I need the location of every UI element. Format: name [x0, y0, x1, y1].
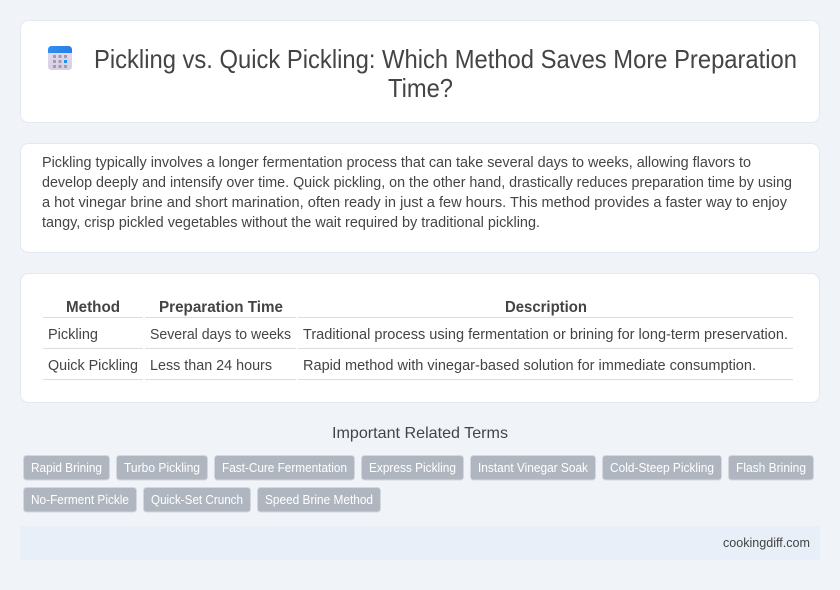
related term tags: Fast-Cure Fermentation: [222, 460, 347, 475]
related term tags: Cold-Steep Pickling: [610, 460, 714, 475]
related term tags: Turbo Pickling: [124, 460, 200, 475]
table row: quick pickling: Quick Pickling: [48, 358, 138, 374]
panel: comparison table: [20, 274, 820, 402]
related term tags: No-Ferment Pickle: [31, 492, 129, 507]
heading: Time?: [388, 75, 453, 103]
table header: Method: [66, 299, 120, 316]
related term tags: Quick-Set Crunch: [151, 492, 243, 507]
table row: pickling: Pickling: [48, 327, 98, 343]
table header: Preparation Time: [159, 299, 283, 316]
related term tags: Rapid Brining: [31, 460, 102, 475]
related term tags: Speed Brine Method: [265, 492, 373, 507]
footer bar: cookingdiff.com: [723, 535, 810, 550]
heading: Pickling vs. Quick Pickling: Which Method Saves More Preparation: [94, 46, 797, 74]
footer bar: [20, 526, 820, 560]
related term tags: [24, 456, 814, 512]
text block: summary: Pickling typically involves a longer fermentation process that can take several days to weeks, allowing flavors to: [42, 155, 751, 171]
icon: calendar: [48, 46, 72, 70]
text block: summary: a hot vinegar brine and short marination, often ready in just a few hours. This method provides a faster way to enjoy: [42, 195, 788, 211]
panel: summary paragraph: [20, 144, 820, 252]
related term tags: Flash Brining: [736, 460, 806, 475]
table header: [66, 299, 587, 316]
heading: related terms: Important Related Terms: [332, 425, 508, 442]
table row: quick pickling: Less than 24 hours: [150, 358, 272, 374]
table row: quick pickling: Rapid method with vinegar-based solution for immediate consumption.: [303, 358, 756, 374]
related term tags: Express Pickling: [369, 460, 456, 475]
table row: pickling: Traditional process using fermentation or brining for long-term preservation.: [303, 327, 788, 343]
heading: [94, 46, 797, 103]
table row: pickling: [48, 327, 788, 343]
table row: pickling: Several days to weeks: [150, 327, 291, 343]
text block: summary: [42, 155, 792, 231]
table header: Description: [505, 299, 587, 316]
related term tags: Instant Vinegar Soak: [478, 460, 589, 475]
panel: title: [20, 20, 820, 122]
text block: summary: develop deeply and intensify over time. Quick pickling, on the other hand, drastically reduces preparation time by using: [42, 175, 792, 191]
table row: quick pickling: [48, 358, 756, 374]
text block: summary: tangy, crisp pickled vegetables without the wait required by traditional pickling.: [42, 215, 540, 231]
